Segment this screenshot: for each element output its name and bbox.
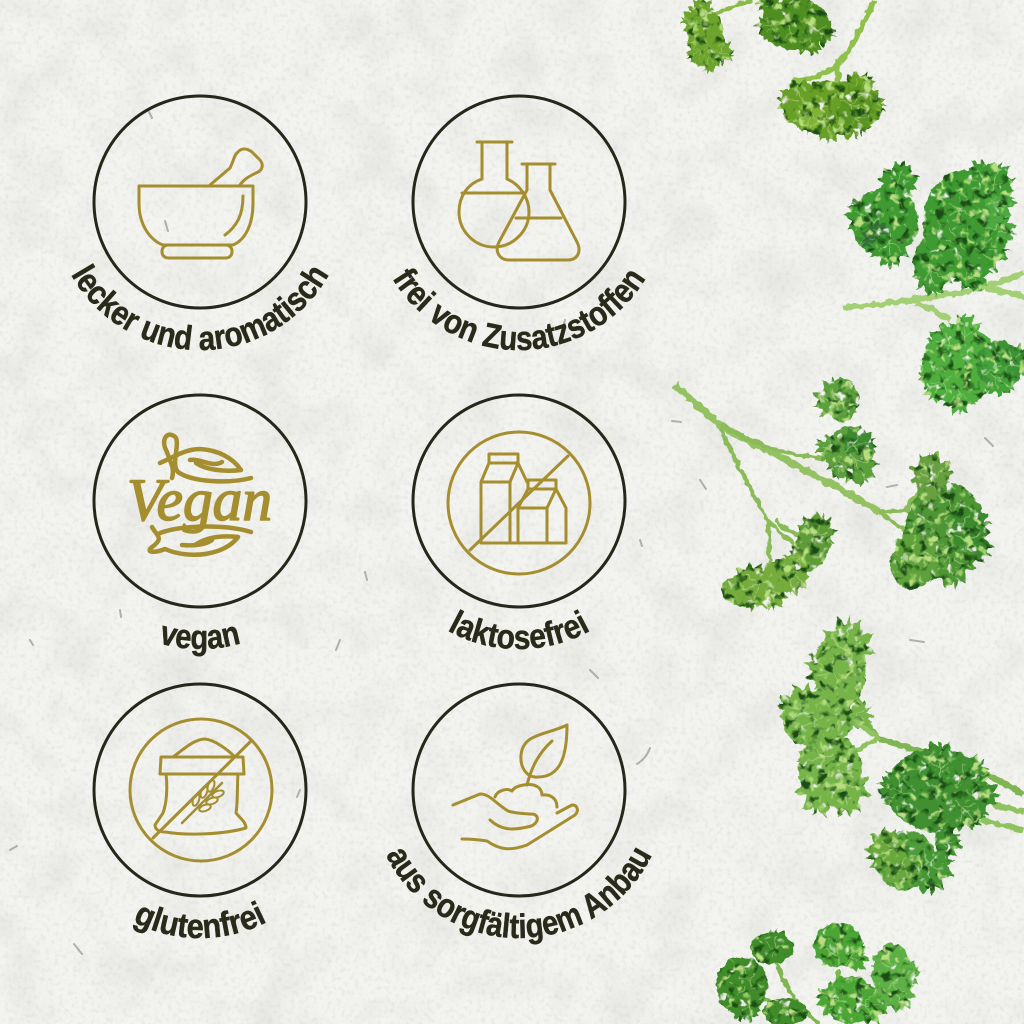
label: glutenfrei <box>132 900 266 938</box>
badge: glutenfrei <box>92 682 308 938</box>
label: lecker und aromatisch <box>72 263 329 350</box>
label: frei von Zusatzstoffen <box>393 268 646 350</box>
icon: vegan lettering with leaves <box>127 435 272 555</box>
icon: crossed out flour bag <box>130 719 272 861</box>
icon: hand holding seedling <box>453 725 577 849</box>
icon: mortar and pestle <box>139 149 262 258</box>
label: vegan <box>162 626 240 656</box>
label: aus sorgfältigem Anbau <box>387 847 652 944</box>
icon: crossed out milk cartons <box>448 432 590 574</box>
badge: vegan <box>92 394 308 656</box>
sprig: bottom parsley <box>716 923 929 1024</box>
sprig: top curly parsley <box>675 0 888 149</box>
sprig: upper right flat parsley <box>835 151 1024 417</box>
icon: vegan lettering with leaves: Vegan <box>127 467 272 533</box>
sprig: middle parsley with long stem <box>675 373 1004 618</box>
badge: frei von Zusatzstoffen <box>393 94 646 350</box>
sprig: lower parsley <box>774 613 1024 900</box>
badge: aus sorgfaeltigem Anbau <box>387 682 652 944</box>
label: laktosefrei <box>448 609 590 650</box>
badge: lecker und aromatisch <box>72 94 329 350</box>
badge: laktosefrei <box>412 394 626 650</box>
icon: laboratory flasks <box>459 142 579 260</box>
